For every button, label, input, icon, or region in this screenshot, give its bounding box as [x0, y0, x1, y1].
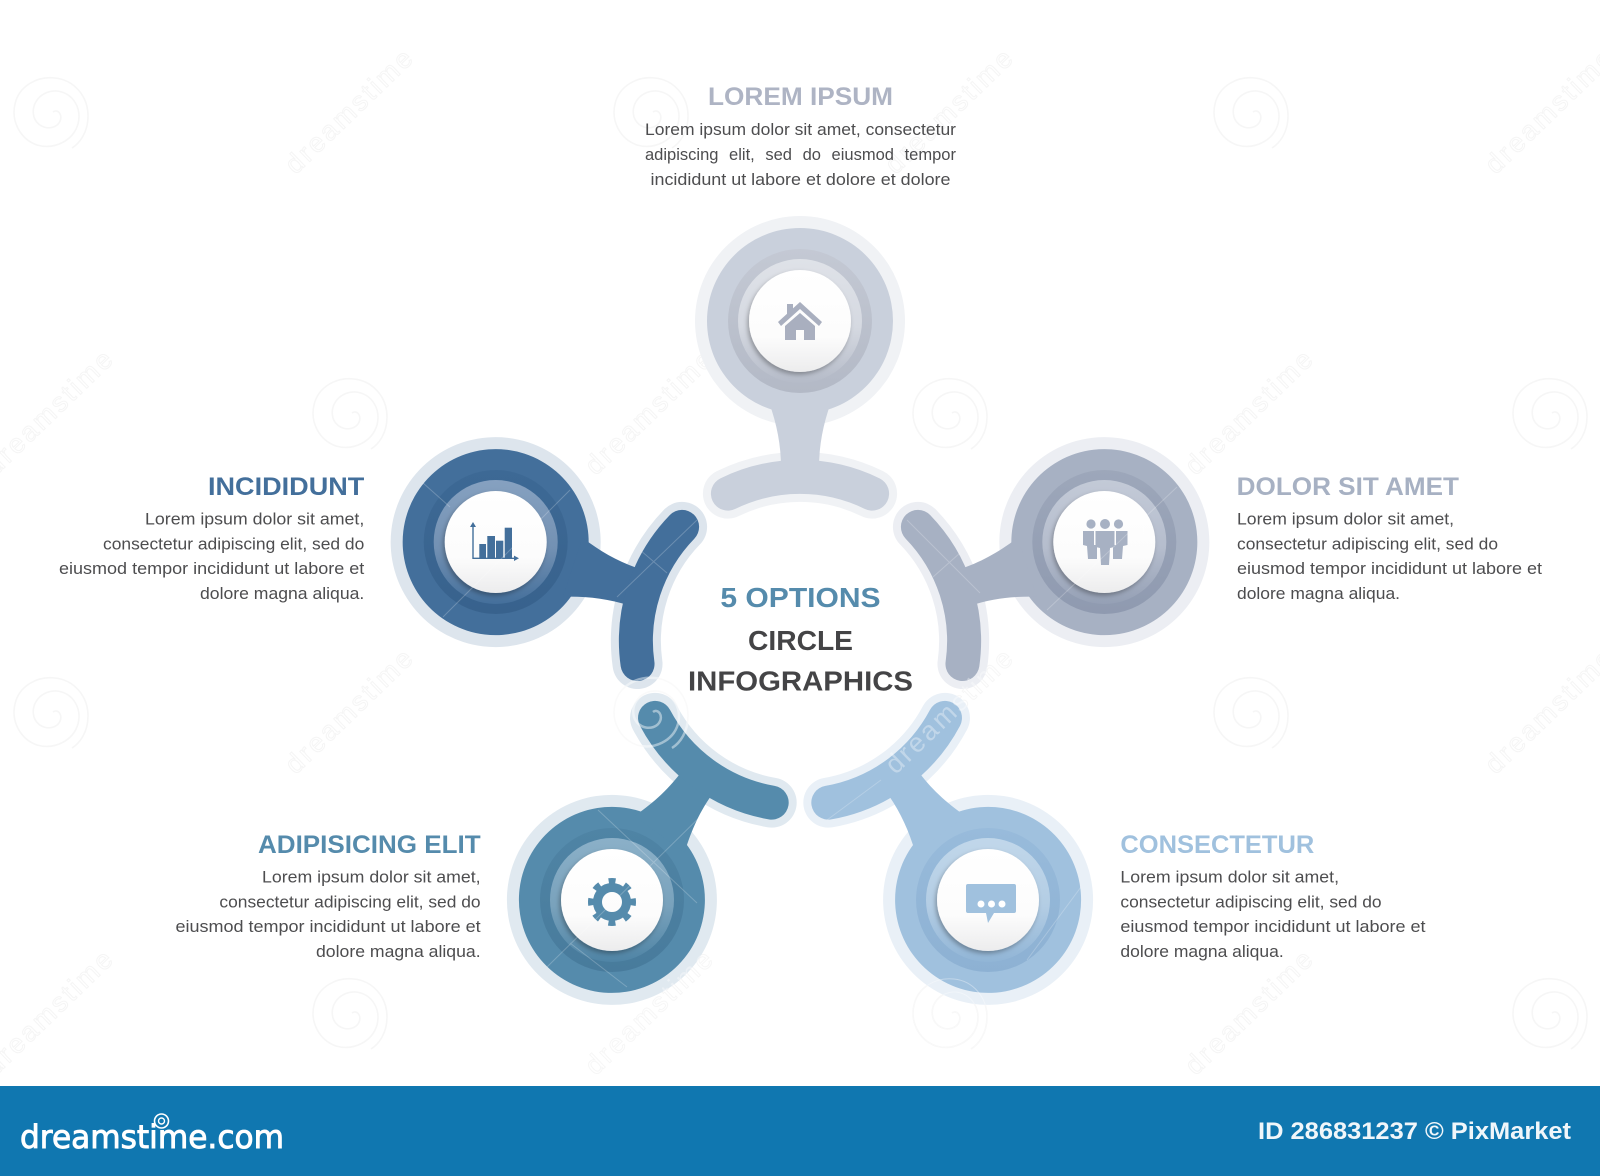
- watermark pattern on background: dreamstime: [879, 643, 1019, 780]
- text block: top option: incididunt ut labore et dolore et dolore: [650, 171, 950, 189]
- inner rings right: [1032, 470, 1176, 614]
- text block: bottom left option: consectetur adipiscing elit, sed do: [219, 894, 481, 912]
- text block: bottom left option: dolore magna aliqua.: [316, 943, 481, 961]
- panel: top option shape: [695, 216, 905, 494]
- petal body bottom right: [802, 699, 1135, 1047]
- inner rings bottom left: [540, 828, 684, 972]
- text block: right option: consectetur adipiscing elit, sed do: [1237, 536, 1498, 554]
- watermark overlay on shapes: dreamstime: [579, 944, 719, 1081]
- text block: left option: consectetur adipiscing elit, sed do: [103, 536, 364, 554]
- watermark overlay on shapes: [423, 483, 1177, 1081]
- watermark pattern on background: dreamstime: [879, 43, 1019, 180]
- inner rings left: [424, 470, 568, 614]
- text block: center title: CIRCLE: [748, 625, 853, 656]
- text block: right option: dolore magna aliqua.: [1237, 585, 1400, 603]
- icon: house: [778, 302, 822, 340]
- text block: bottom right option: CONSECTETUR: [1120, 831, 1314, 859]
- text block: bottom left option: eiusmod tempor incididunt ut labore et: [176, 918, 481, 936]
- watermark overlay on shapes: dreamstime: [879, 643, 1019, 780]
- watermark pattern on background: dreamstime: [279, 643, 419, 780]
- icon: people: [1083, 519, 1128, 565]
- text block: top option: adipiscing elit, sed do eiusmod tempor: [645, 146, 957, 164]
- inner rings bottom right: [916, 828, 1060, 972]
- watermark pattern on background: dreamstime: [1179, 944, 1319, 1081]
- panel: bottom left option shape: [465, 699, 798, 1047]
- petal body top: [695, 216, 905, 494]
- text block: left option: dolore magna aliqua.: [200, 585, 364, 603]
- text block: bottom left option: Lorem ipsum dolor sit amet,: [262, 868, 481, 886]
- text block: bottom right option: Lorem ipsum dolor sit amet,: [1120, 868, 1339, 886]
- text block: center title: 5 OPTIONS: [720, 582, 881, 613]
- text block: right option: [1237, 473, 1542, 603]
- panel: bottom right option shape: [802, 699, 1135, 1047]
- icon: speech bubble: [966, 884, 1016, 923]
- text block: bottom right option: dolore magna aliqua.: [1120, 943, 1284, 961]
- panel: left option shape: [363, 410, 692, 695]
- text block: bottom right option: eiusmod tempor incididunt ut labore et: [1120, 918, 1426, 936]
- petal body bottom left: [465, 699, 798, 1047]
- text block: bottom left option: [176, 831, 481, 961]
- text block: right option: eiusmod tempor incididunt ut labore et: [1237, 560, 1542, 578]
- watermark pattern on background: dreamstime: [579, 344, 719, 481]
- panel: right option shape: [908, 410, 1237, 695]
- text block: left option: [59, 473, 365, 603]
- petal body right: [908, 410, 1237, 695]
- text block: top option: [645, 83, 957, 189]
- text block: left option: eiusmod tempor incididunt ut labore et: [59, 560, 365, 578]
- text block: bottom left option: ADIPISICING ELIT: [258, 831, 481, 859]
- watermark pattern on background: dreamstime: [279, 43, 419, 180]
- text block: left option: Lorem ipsum dolor sit amet,: [145, 510, 364, 528]
- watermark pattern on background: dreamstime: [1179, 344, 1319, 481]
- text block: bottom right option: consectetur adipiscing elit, sed do: [1120, 894, 1382, 912]
- text block: top option: Lorem ipsum dolor sit amet, consectetur: [645, 121, 957, 139]
- icon: gear: [591, 881, 633, 923]
- logo: dreamstime.com: dreamstime.com: [20, 1118, 284, 1156]
- credit line: ID 286831237 © PixMarket: [1258, 1118, 1571, 1145]
- watermark pattern on background: dreamstime: [579, 944, 719, 1081]
- inner rings top: [728, 249, 872, 393]
- text block: right option: DOLOR SIT AMET: [1237, 473, 1459, 501]
- petal body left: [363, 410, 692, 695]
- text block: right option: Lorem ipsum dolor sit amet,: [1237, 510, 1454, 528]
- text block: center title: INFOGRAPHICS: [688, 666, 913, 696]
- text block: bottom right option: [1120, 831, 1426, 961]
- text block: center title: [688, 582, 913, 696]
- footer bar: [0, 1086, 1600, 1176]
- icon: bar chart: [470, 522, 519, 561]
- text block: top option: LOREM IPSUM: [708, 83, 893, 111]
- text block: left option: INCIDIDUNT: [208, 473, 364, 501]
